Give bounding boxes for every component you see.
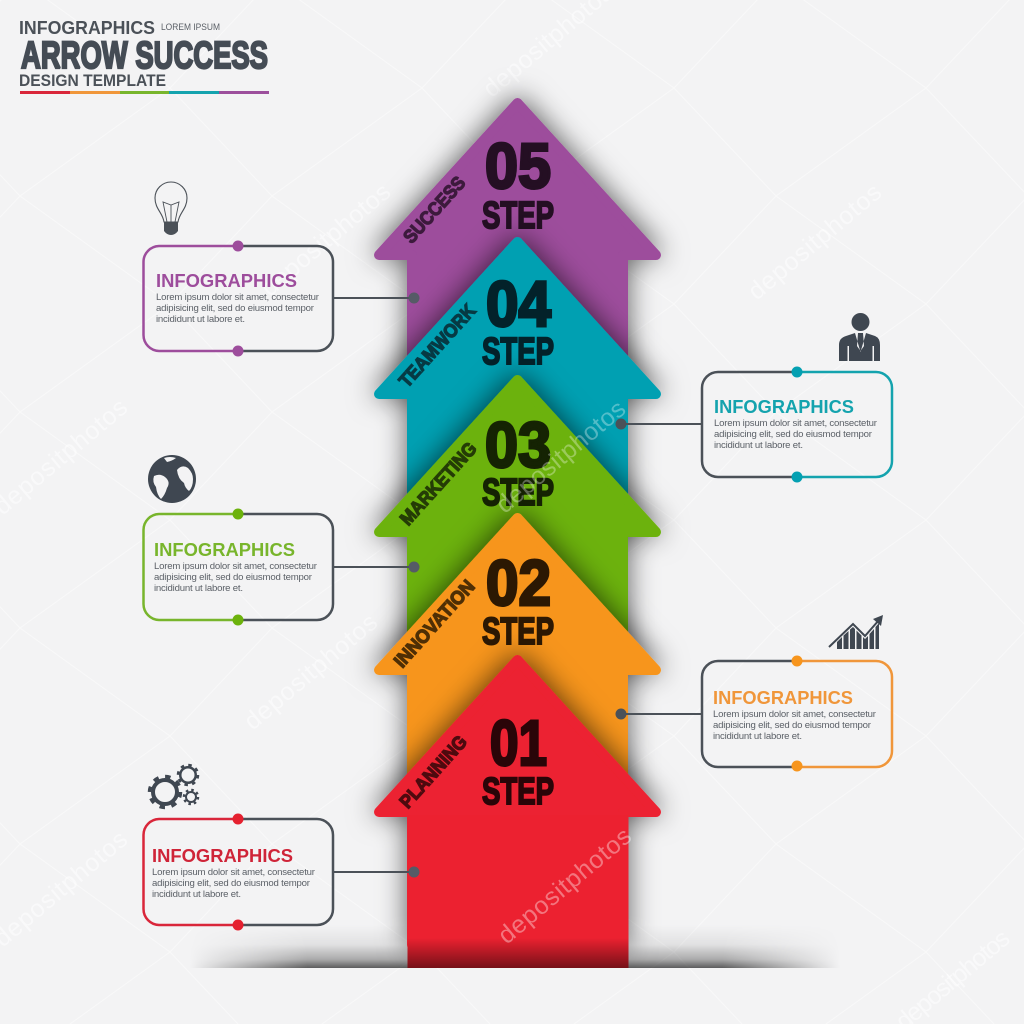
arrow 03 marketing: STEP	[482, 472, 554, 514]
panel: step 03 callout	[144, 508, 420, 626]
body text 03: Lorem ipsum dolor sit amet, consectetur	[154, 561, 318, 572]
body text 01: adipisicing elit, sed do eiusmod tempor	[152, 878, 311, 889]
icon: globe	[148, 455, 196, 503]
subtitle: lorem ipsum: LOREM IPSUM	[161, 22, 220, 32]
background watermarks: depositphotos	[256, 178, 396, 302]
arrow 03 marketing: MARKETING	[396, 439, 482, 530]
arrow 02 innovation: INNOVATION	[390, 576, 480, 672]
heading 05: INFOGRAPHICS	[156, 271, 297, 291]
arrow 01 planning: STEP	[482, 771, 554, 813]
body text 05: adipisicing elit, sed do eiusmod tempor	[156, 303, 315, 314]
body text 01: incididunt ut labore et.	[152, 889, 241, 900]
arrow 05 success: STEP	[482, 195, 554, 237]
icon: growth chart	[829, 615, 883, 649]
arrow stack	[379, 103, 656, 968]
arrow 04 teamwork: STEP	[482, 331, 554, 373]
background watermarks: depositphotos	[239, 608, 383, 736]
arrow 05 success	[379, 103, 656, 388]
body text 04: adipisicing elit, sed do eiusmod tempor	[714, 429, 873, 440]
background watermarks: depositphotos	[743, 178, 887, 306]
arrow 01 planning: 01	[490, 707, 547, 779]
body text 03: adipisicing elit, sed do eiusmod tempor	[154, 572, 313, 583]
arrow 02 innovation: 02	[486, 547, 551, 619]
title: infographics: INFOGRAPHICS	[19, 18, 155, 38]
arrow 03 marketing	[379, 380, 656, 665]
arrow 04 teamwork	[379, 242, 656, 527]
heading 02: INFOGRAPHICS	[713, 688, 853, 708]
arrow 01 planning	[379, 660, 656, 968]
panel: step 04 callout	[616, 366, 892, 482]
connector 01	[333, 866, 420, 878]
body text 05: incididunt ut labore et.	[156, 314, 245, 325]
body text 04: Lorem ipsum dolor sit amet, consectetur	[714, 418, 878, 429]
arrow watermarks: depositphotos	[491, 395, 631, 519]
arrow 03 marketing: 03	[485, 409, 551, 481]
icon: gears	[150, 765, 198, 808]
connector 03	[333, 562, 420, 572]
body text 05: Lorem ipsum dolor sit amet, consectetur	[156, 292, 320, 303]
arrow 05 success: 05	[485, 130, 551, 202]
heading 04: INFOGRAPHICS	[714, 397, 854, 417]
icon: light bulb	[155, 182, 187, 235]
panel: step 01 callout	[144, 814, 420, 930]
arrow 02 innovation: STEP	[482, 611, 554, 653]
body text 01: Lorem ipsum dolor sit amet, consectetur	[152, 867, 316, 878]
arrow 04 teamwork: 04	[486, 268, 551, 340]
arrow watermarks	[491, 395, 637, 950]
connector 04	[616, 418, 702, 430]
rainbow underline	[20, 91, 269, 94]
arrow 01 planning: PLANNING	[396, 732, 472, 813]
arrow watermarks: depositphotos	[493, 822, 637, 950]
body text 04: incididunt ut labore et.	[714, 440, 803, 451]
floor shadow	[196, 934, 834, 968]
title: arrow success: ARROW SUCCESS	[21, 35, 268, 77]
panel: step 02 callout	[616, 656, 892, 772]
body text 02: incididunt ut labore et.	[713, 731, 802, 742]
heading 01: INFOGRAPHICS	[152, 846, 293, 866]
body text 03: incididunt ut labore et.	[154, 583, 243, 594]
body text 02: Lorem ipsum dolor sit amet, consectetur	[713, 709, 877, 720]
title: design template: DESIGN TEMPLATE	[19, 71, 166, 90]
title block	[19, 18, 269, 94]
arrow 04 teamwork: TEAMWORK	[395, 300, 481, 392]
connector 05	[333, 292, 420, 304]
body text 02: adipisicing elit, sed do eiusmod tempor	[713, 720, 872, 731]
arrow 02 innovation	[379, 518, 656, 803]
icon: business person	[839, 313, 880, 361]
arrow 05 success: SUCCESS	[400, 173, 470, 248]
connector 02	[616, 708, 702, 720]
panel: step 05 callout	[144, 240, 420, 356]
heading 03: INFOGRAPHICS	[154, 540, 295, 560]
